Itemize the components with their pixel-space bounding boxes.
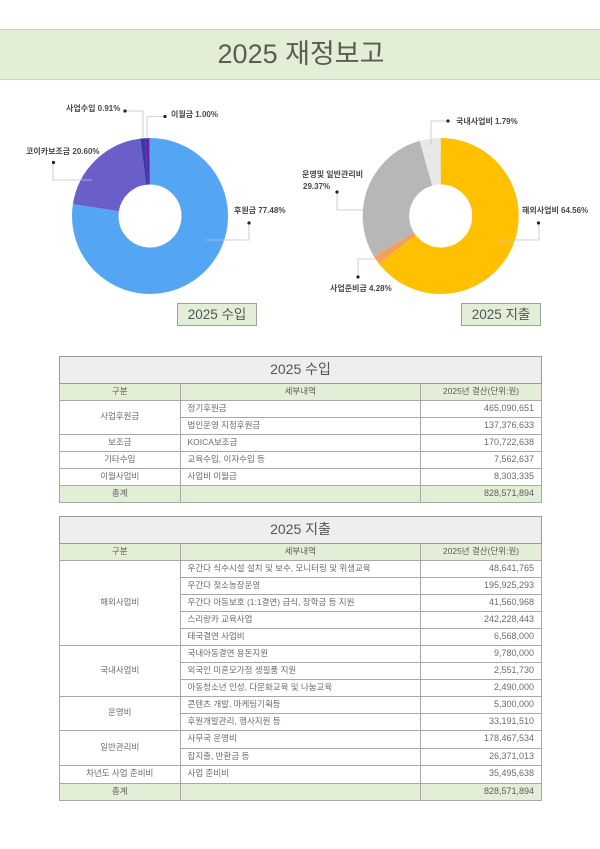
table: 2025 income: 이월사업비 <box>100 471 139 481</box>
table: 2025 expense: 외국인 미혼모가정 생필품 지원 <box>188 665 296 675</box>
table: 2025 income: 구분 <box>112 386 128 396</box>
table: 2025 income: 사업후원금 <box>100 411 139 421</box>
table: 2025 income: 170,722,638 <box>484 436 534 446</box>
table: 2025 income: 정기후원금 <box>188 403 227 413</box>
table: 2025 income: 7,562,637 <box>494 454 534 464</box>
label: business income: 사업수입 0.91% <box>66 103 120 113</box>
table: 2025 income: 총계 <box>112 488 128 498</box>
table: 2025 income: 465,090,651 <box>484 402 534 412</box>
leader lines: income <box>53 111 249 240</box>
table: 2025 income: 828,571,894 <box>484 488 534 498</box>
tag: 2025 expense <box>461 303 541 326</box>
table: 2025 expense: 세부내역 <box>285 546 316 556</box>
table: 2025 expense: 구분 <box>112 546 128 556</box>
table: 2025 expense: 41,560,968 <box>489 596 534 606</box>
table: 2025 income: KOICA보조금 <box>188 437 237 447</box>
table: 2025 expense: 콘텐츠 개발, 마케팅기획등 <box>188 699 281 709</box>
table: 2025 expense: 일반관리비 <box>100 742 139 752</box>
table: 2025 expense: 후원개발관리, 행사지원 등 <box>188 716 281 726</box>
table: 2025 expense: 총계 <box>112 786 128 796</box>
tag: 2025 expense: 2025 지출 <box>472 307 530 322</box>
table: 2025 expense: 6,568,000 <box>494 630 534 640</box>
table: 2025 expense: 2,551,730 <box>494 664 534 674</box>
table: 2025 income: 교육수입, 이자수입 등 <box>188 454 265 464</box>
table: 2025 expense: 운영비 <box>108 707 131 717</box>
table: 2025 expense: 5,300,000 <box>494 698 534 708</box>
donut segments: income <box>95 161 205 271</box>
table: 2025 income: 세부내역 <box>285 386 316 396</box>
table: 2025 income: 보조금 <box>108 437 131 447</box>
table: 2025 expense: 2025 지출 <box>270 521 331 537</box>
label: operations and admin: 운영및 일반관리비 <box>302 170 363 179</box>
table: 2025 income: 기타수입 <box>104 454 135 464</box>
table: 2025 expense: 9,780,000 <box>494 648 534 658</box>
leader dots: expense <box>335 119 540 279</box>
table: 2025 expense: 국내사업비 <box>100 665 139 675</box>
table: 2025 expense: 국내아동결연 용돈지원 <box>188 648 268 658</box>
table: 2025 expense: 잡지출, 반환금 등 <box>188 751 249 761</box>
label: donations: 후원금 77.48% <box>234 205 285 215</box>
table: 2025 expense: 35,495,638 <box>489 768 534 778</box>
table: 2025 expense <box>59 516 542 801</box>
leader dots: income <box>52 109 251 225</box>
table: 2025 expense: 해외사업비 <box>100 597 139 607</box>
table: 2025 expense: 사무국 운영비 <box>188 733 237 743</box>
table: 2025 expense: 우간다 식수시설 설치 및 보수, 모니터링 및 위생교육 <box>188 563 371 573</box>
table: 2025 expense: 태국결연 사업비 <box>188 631 245 641</box>
table: 2025 expense: 178,467,534 <box>484 733 534 743</box>
label: operations and admin: 29.37% <box>303 182 330 191</box>
donut segments: expense <box>386 161 495 271</box>
table: 2025 income <box>59 356 542 503</box>
table: 2025 income: 법인운영 지정후원금 <box>188 420 260 430</box>
label: overseas projects: 해외사업비 64.56% <box>522 205 588 215</box>
table: 2025 expense: 2,490,000 <box>494 682 534 692</box>
table: 2025 expense: 2025년 결산(단위:원) <box>443 546 519 556</box>
title band: 2025 재정보고 <box>218 39 384 69</box>
table: 2025 expense: 48,641,765 <box>489 562 534 572</box>
table: 2025 expense: 아동청소년 인성, 다문화교육 및 나눔교육 <box>188 682 332 692</box>
label: KOICA subsidy: 코이카보조금 20.60% <box>26 146 100 156</box>
table: 2025 expense: 33,191,510 <box>489 716 534 726</box>
tag: 2025 income <box>177 303 257 326</box>
table: 2025 income: 사업비 이월금 <box>188 471 237 481</box>
table: 2025 expense: 828,571,894 <box>484 786 534 796</box>
table: 2025 expense: 242,228,443 <box>484 614 534 624</box>
label: carryover: 이월금 1.00% <box>171 109 218 119</box>
table: 2025 expense: 195,925,293 <box>484 580 534 590</box>
tag: 2025 income: 2025 수입 <box>188 307 246 322</box>
title band <box>0 29 600 80</box>
table: 2025 expense: 차년도 사업 준비비 <box>86 768 153 778</box>
table: 2025 income: 8,303,335 <box>494 470 534 480</box>
table: 2025 expense: 우간다 젖소농장운영 <box>188 580 260 590</box>
chart: 2025 income donut <box>26 103 286 294</box>
label: project reserve: 사업준비금 4.28% <box>330 283 392 293</box>
label: domestic projects: 국내사업비 1.79% <box>456 116 518 126</box>
table: 2025 expense: 우간다 아동보호 (1:1결연) 급식, 장학금 등 지원 <box>188 597 354 607</box>
table: 2025 expense: 스리랑카 교육사업 <box>188 614 252 624</box>
table: 2025 income: 2025년 결산(단위:원) <box>443 386 519 396</box>
chart: 2025 expense donut <box>302 116 588 294</box>
table: 2025 income: 2025 수입 <box>270 361 331 377</box>
leader lines: expense <box>337 121 539 277</box>
table: 2025 income: 137,376,633 <box>484 420 534 430</box>
table: 2025 expense: 사업 준비비 <box>188 768 229 778</box>
table: 2025 expense: 26,371,013 <box>489 750 534 760</box>
